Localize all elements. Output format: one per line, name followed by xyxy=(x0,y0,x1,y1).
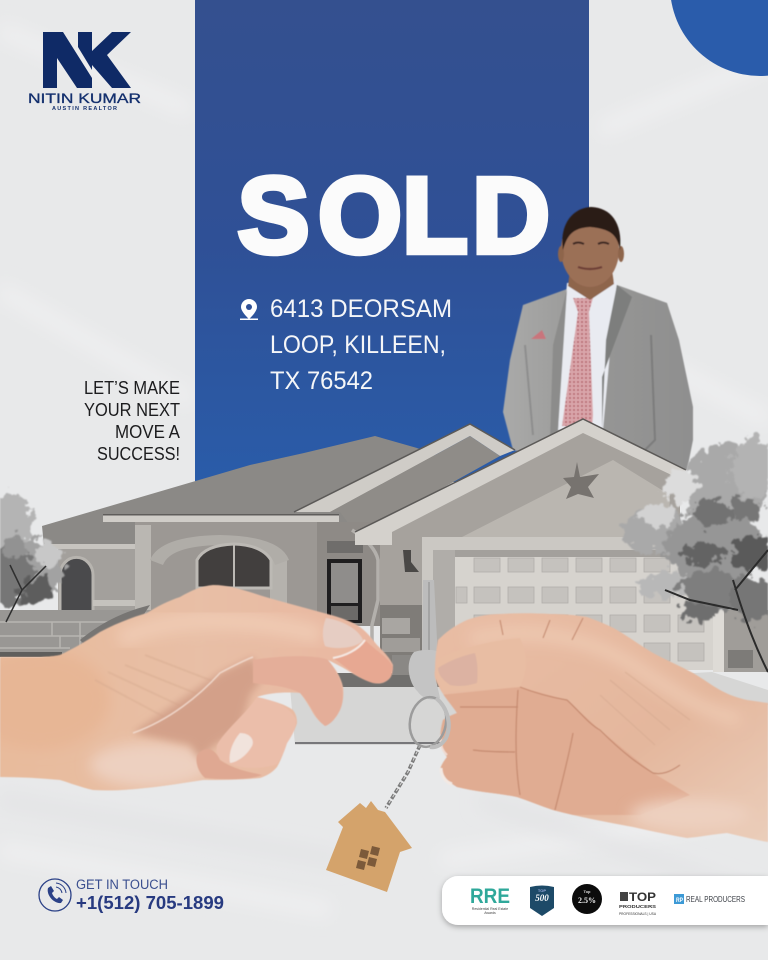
tagline: MOVE A xyxy=(115,422,180,442)
head xyxy=(561,213,619,287)
tree: right xyxy=(623,438,768,672)
stone by garage xyxy=(380,605,425,665)
star ornament xyxy=(563,462,599,499)
driveway xyxy=(290,672,768,745)
fingertip xyxy=(333,640,393,683)
wrist tone xyxy=(26,656,106,742)
pale fingertips xyxy=(441,768,452,784)
badge: Top 2.5%: Top xyxy=(583,889,591,894)
chain xyxy=(386,745,420,808)
badge: RRE: Residential Real Estate xyxy=(472,907,508,911)
thumb fold highlight xyxy=(133,657,253,733)
badge: Top 2.5%: 2.5% xyxy=(578,896,596,905)
finger creases xyxy=(460,618,680,810)
palm and fingers shade xyxy=(435,687,690,815)
left wall xyxy=(58,546,358,626)
badge: RRE: RRE xyxy=(470,885,510,908)
tree: left xyxy=(0,493,63,622)
person: realtor in grey suit xyxy=(503,207,693,470)
logo subtitle: AUSTIN REALTOR xyxy=(52,106,117,112)
middle finger xyxy=(253,656,343,726)
nail rim xyxy=(333,640,365,658)
hand: right xyxy=(430,605,768,850)
house xyxy=(0,419,768,745)
tagline xyxy=(84,378,180,464)
house key fob xyxy=(326,801,412,892)
thumbnail xyxy=(323,618,363,648)
hair xyxy=(562,207,620,250)
key blade xyxy=(422,580,437,665)
main roof xyxy=(42,436,470,546)
phone number: +1(512) 705-1899 xyxy=(76,893,224,913)
address text: 6413 DEORSAM xyxy=(270,295,452,323)
side window xyxy=(60,557,93,618)
face features xyxy=(573,242,609,244)
pale lower palm xyxy=(90,743,210,787)
right side stone xyxy=(713,610,768,672)
hand: left xyxy=(0,580,400,795)
fourth finger xyxy=(196,749,262,779)
third finger xyxy=(217,704,252,748)
entry wall xyxy=(317,522,382,626)
thumb top light xyxy=(470,633,740,720)
badge: Real Producers: RP xyxy=(676,898,683,904)
front fascia xyxy=(103,514,339,522)
lapel shade xyxy=(602,285,632,430)
badge: Top Producers: TOP xyxy=(629,890,656,904)
badge: Top Producers xyxy=(619,890,657,916)
lower finger nail xyxy=(230,733,253,763)
thumb xyxy=(436,638,526,691)
key ring xyxy=(406,694,450,750)
arched window xyxy=(197,544,271,588)
badge: Top Producers: PROFESSIONALS | USA xyxy=(619,912,657,916)
garage frame xyxy=(422,537,713,670)
heading: SOLD: SOLD xyxy=(238,154,550,276)
badge: Top 500 xyxy=(530,886,554,916)
contact label: GET IN TOUCH xyxy=(76,877,168,892)
garage door xyxy=(433,550,713,670)
tagline: YOUR NEXT xyxy=(84,400,180,420)
lower hand light xyxy=(630,799,750,831)
icon: phone xyxy=(39,879,71,911)
wrinkle band xyxy=(626,672,644,686)
contact block xyxy=(39,877,224,913)
badge: Real Producers: REAL PRODUCERS xyxy=(686,895,745,904)
jacket xyxy=(503,285,693,470)
badge: Real Producers xyxy=(674,894,745,904)
tagline: SUCCESS! xyxy=(97,444,180,464)
left stone wall xyxy=(0,605,150,657)
pocket square xyxy=(531,330,546,339)
key head xyxy=(409,650,442,700)
inner palm shadow xyxy=(133,657,262,760)
shirt xyxy=(558,281,617,430)
back of hand highlight xyxy=(120,621,320,640)
tagline: LET’S MAKE xyxy=(84,378,180,398)
right gable trim xyxy=(355,419,686,545)
door xyxy=(327,559,362,623)
address text: TX 76542 xyxy=(270,367,373,395)
tie xyxy=(562,298,593,428)
ears xyxy=(558,246,564,262)
thumbnail xyxy=(438,653,478,686)
badge: RRE: Awards xyxy=(484,911,496,915)
wall lamp xyxy=(403,550,419,572)
logo: Nitin Kumar xyxy=(28,32,141,112)
key with chain and fob xyxy=(326,580,442,892)
address text: LOOP, KILLEEN, xyxy=(270,331,446,359)
middle gable xyxy=(294,424,515,512)
icon: location pin xyxy=(240,299,258,320)
badge: Top 500: TOP xyxy=(538,888,546,893)
blue panel xyxy=(195,0,589,482)
badge: Top Producers: PRODUCERS xyxy=(619,904,656,909)
gutter xyxy=(352,530,378,650)
logo name: NITIN KUMAR xyxy=(28,90,141,106)
logo mark NK xyxy=(43,32,131,88)
sleeve shade xyxy=(640,335,655,455)
porch front xyxy=(135,522,317,612)
badge: Top 2.5% xyxy=(572,884,602,914)
wrinkle band xyxy=(116,656,204,711)
neck xyxy=(568,270,614,300)
address text xyxy=(270,295,452,395)
awards panel xyxy=(442,876,768,925)
badge: Top 500: 500 xyxy=(535,893,549,903)
right gable wall xyxy=(380,428,680,660)
corner circle xyxy=(670,0,768,76)
